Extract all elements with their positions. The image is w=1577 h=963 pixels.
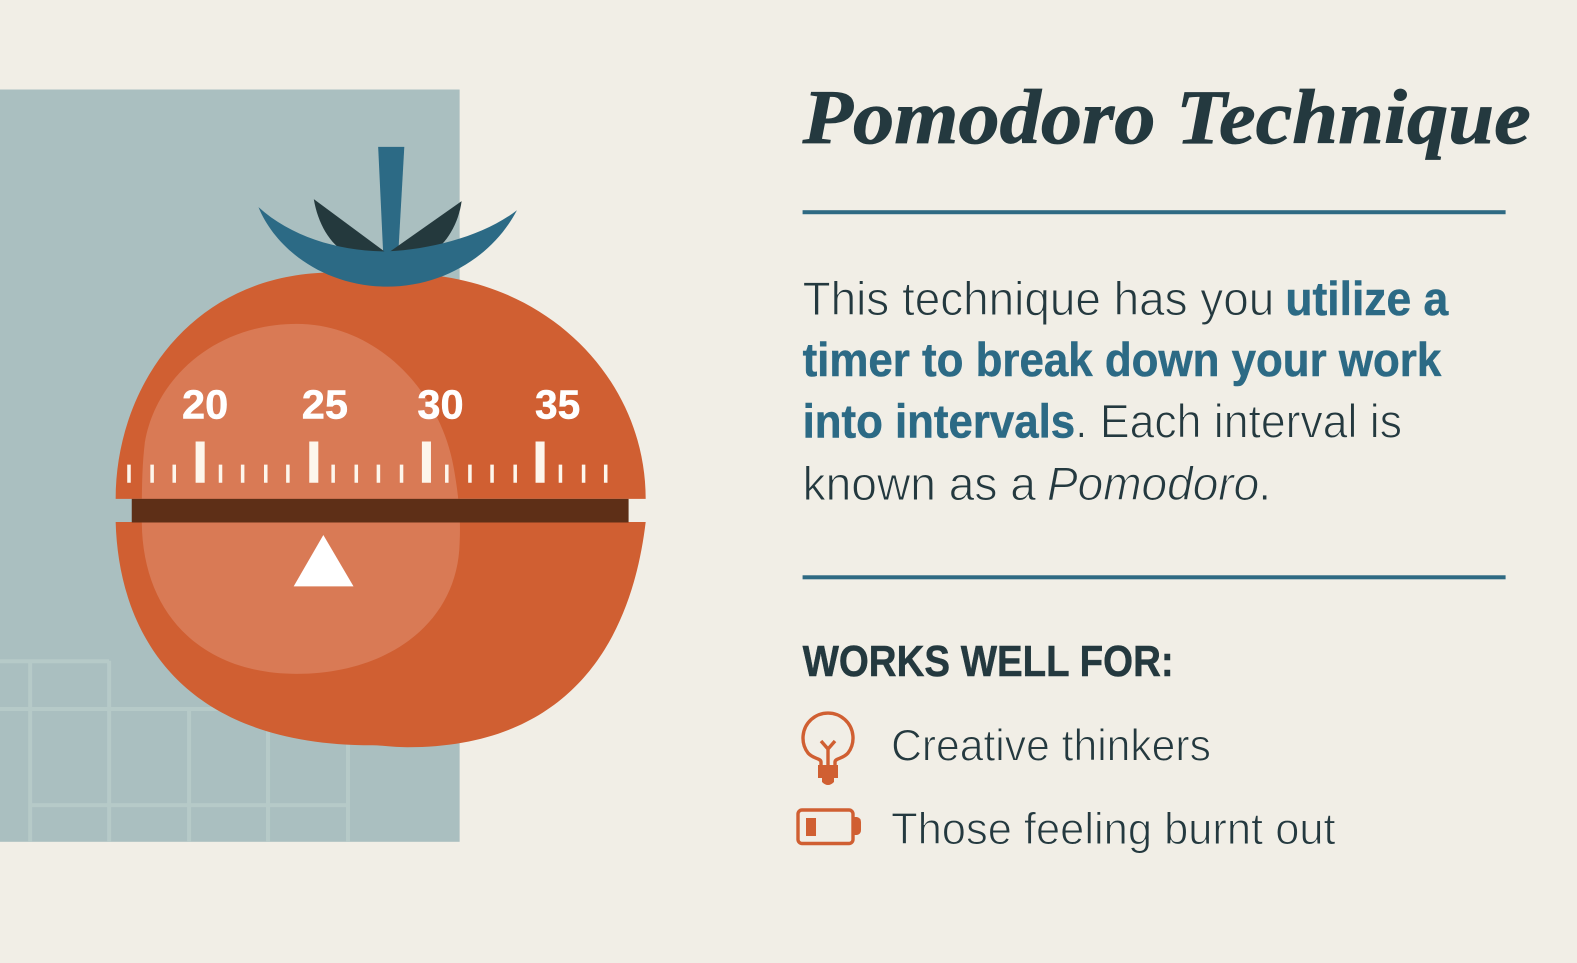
divider bottom xyxy=(803,575,1506,579)
line 3: . Each interval is xyxy=(1075,395,1402,448)
timer upper body xyxy=(116,273,646,499)
heading: works well for: WORKS WELL FOR: xyxy=(803,638,1174,686)
line 4: known as a xyxy=(803,458,1037,511)
timer numbers: 30 xyxy=(417,381,464,427)
timer numbers xyxy=(182,381,580,427)
title: Pomodoro Technique xyxy=(802,74,1531,160)
dark leaf left xyxy=(314,199,387,253)
divider top xyxy=(803,210,1506,214)
panel: blue-grey background square with grid xyxy=(0,90,460,842)
line 4: . xyxy=(1258,458,1271,511)
line 3 xyxy=(803,395,1402,448)
icon: low battery xyxy=(798,810,861,844)
pointer triangle xyxy=(294,535,354,586)
line 2: timer to break down your work xyxy=(803,334,1442,387)
highlight shape xyxy=(142,324,460,674)
line 1: utilize a xyxy=(1285,273,1449,326)
line 1: This technique has you xyxy=(803,273,1274,326)
stem xyxy=(378,147,404,253)
centre dark band xyxy=(132,499,629,522)
timer lower body xyxy=(116,522,646,747)
icon: light bulb xyxy=(803,713,853,785)
timer numbers: 35 xyxy=(535,381,580,427)
body paragraph xyxy=(803,273,1449,511)
line 4: Pomodoro xyxy=(1047,458,1259,511)
list item: creative thinkers: Creative thinkers xyxy=(891,720,1211,770)
crescent leaf xyxy=(258,207,517,287)
line 4 xyxy=(803,458,1271,511)
tick marks xyxy=(127,442,607,483)
line 3: into intervals xyxy=(803,395,1075,448)
dark leaf right xyxy=(387,201,462,253)
list item: those feeling burnt out: Those feeling burnt out xyxy=(891,804,1336,854)
timer numbers: 20 xyxy=(182,381,228,427)
illustration: tomato kitchen timer xyxy=(116,147,646,747)
timer numbers: 25 xyxy=(302,381,348,427)
